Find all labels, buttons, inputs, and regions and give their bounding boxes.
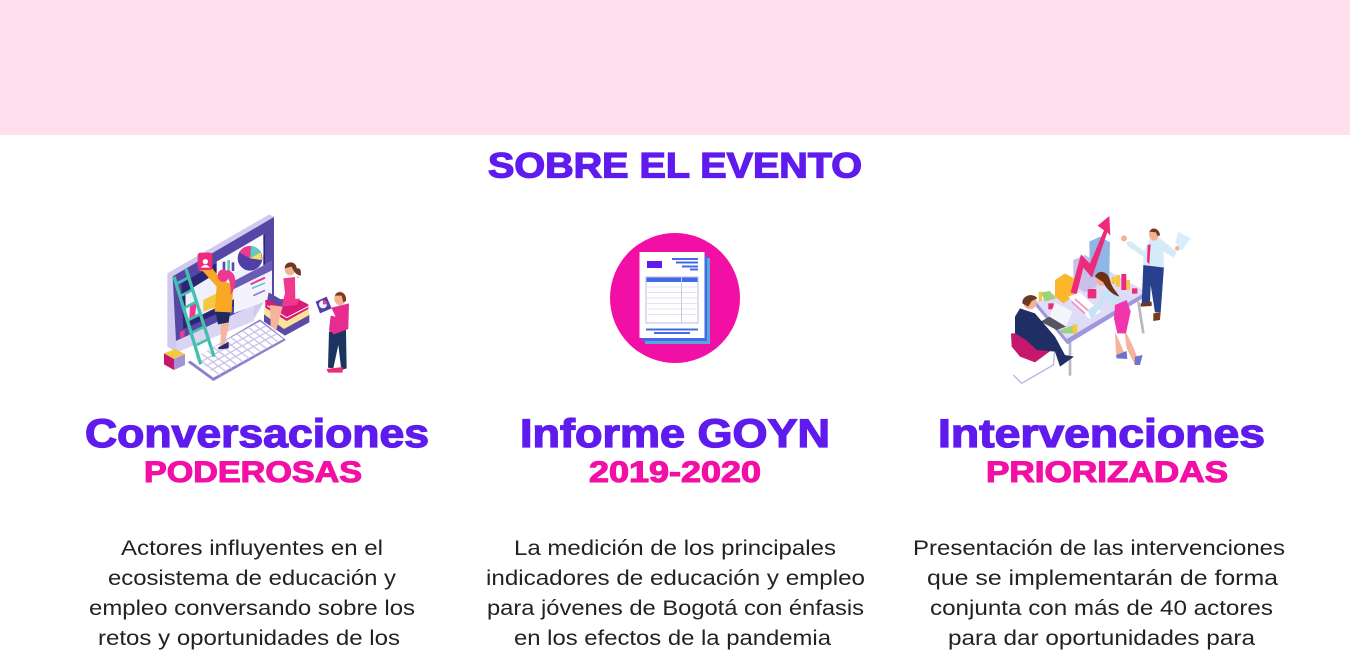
description: para jóvenes de Bogotá con énfasis — [487, 596, 864, 620]
panel: intervenciones priorizadas — [913, 216, 1285, 650]
papers and cup — [1088, 289, 1096, 298]
description: conjunta con más de 40 actores — [930, 596, 1273, 620]
description: retos y oportunidades de los — [98, 626, 400, 650]
seated man — [1013, 348, 1055, 383]
icon: monitor with people — [164, 214, 349, 381]
description: empleo conversando sobre los — [89, 596, 415, 620]
panel: informe GOYN — [486, 233, 865, 650]
top pink banner — [0, 0, 1350, 135]
table — [1036, 272, 1147, 342]
standing man — [1142, 265, 1164, 312]
description: ecosistema de educación y — [108, 566, 396, 590]
leaning woman — [1115, 328, 1139, 365]
description — [913, 536, 1285, 650]
description: para dar oportunidades para — [948, 626, 1255, 650]
icon: team around table — [1011, 216, 1191, 383]
description: Actores influyentes en el — [121, 536, 383, 560]
description: Presentación de las intervenciones — [913, 536, 1285, 560]
icon: report document — [610, 233, 740, 363]
heading: Conversaciones — [85, 412, 429, 456]
arrow — [1071, 216, 1110, 294]
panel: conversaciones poderosas — [85, 214, 429, 650]
seated woman — [270, 305, 283, 331]
description: La medición de los principales — [514, 536, 836, 560]
laptop — [1049, 302, 1073, 327]
description — [486, 536, 865, 650]
books — [264, 313, 309, 336]
standing man — [328, 330, 347, 370]
description: que se implementarán de forma — [927, 566, 1278, 590]
heading: Intervenciones — [938, 412, 1265, 456]
subheading: 2019-2020 — [589, 456, 761, 489]
subheading: PODEROSAS — [144, 456, 362, 489]
ladder — [174, 269, 214, 364]
subheading: PRIORIZADAS — [986, 456, 1228, 489]
heading: Informe GOYN — [520, 412, 830, 456]
keyboard — [188, 319, 286, 381]
description — [89, 536, 415, 650]
description: indicadores de educación y empleo — [486, 566, 865, 590]
woman on ladder — [221, 322, 229, 345]
description: en los efectos de la pandemia — [514, 626, 831, 650]
title: SOBRE EL EVENTO — [488, 146, 862, 186]
table legs — [1070, 302, 1143, 376]
cube — [164, 349, 185, 359]
bars — [1073, 255, 1097, 292]
